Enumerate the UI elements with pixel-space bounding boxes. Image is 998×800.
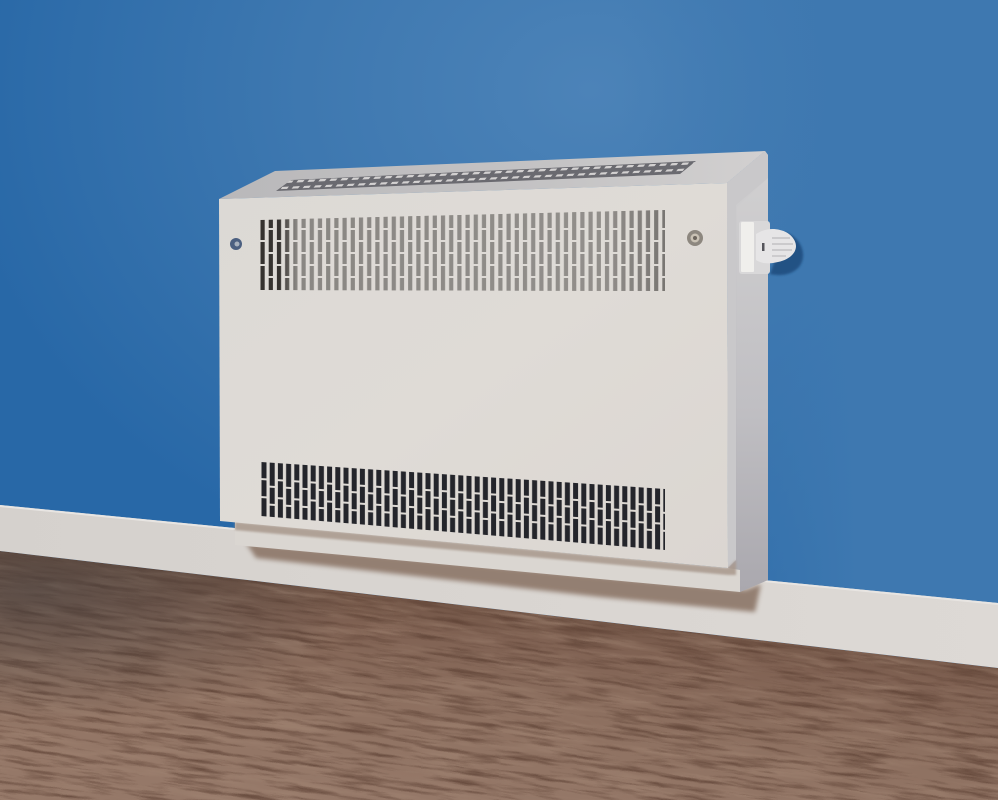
thermostat head <box>756 229 796 263</box>
thermostat front plate <box>741 222 754 272</box>
top vent <box>276 161 696 191</box>
left lock <box>230 238 242 250</box>
thermostat ribs <box>772 238 793 256</box>
thermostat shadow <box>770 232 803 275</box>
thermostat slot <box>762 243 764 251</box>
white skirting board <box>0 505 998 668</box>
thermostat valve <box>739 221 796 274</box>
wooden floor <box>0 551 998 800</box>
lower trim strip <box>235 522 740 592</box>
shadow cast under radiator cover <box>246 543 761 612</box>
right lock <box>687 230 703 246</box>
side bevel <box>727 151 768 568</box>
front panel <box>219 183 728 568</box>
upper grille <box>260 210 665 291</box>
radiator cover <box>219 151 768 592</box>
cover right side panel <box>727 151 768 592</box>
shadow line below the front panel <box>235 522 736 575</box>
sloped top panel <box>219 151 765 199</box>
side inner recess <box>737 178 768 592</box>
thermostat mounting block <box>739 221 770 274</box>
lower grille <box>261 462 665 550</box>
